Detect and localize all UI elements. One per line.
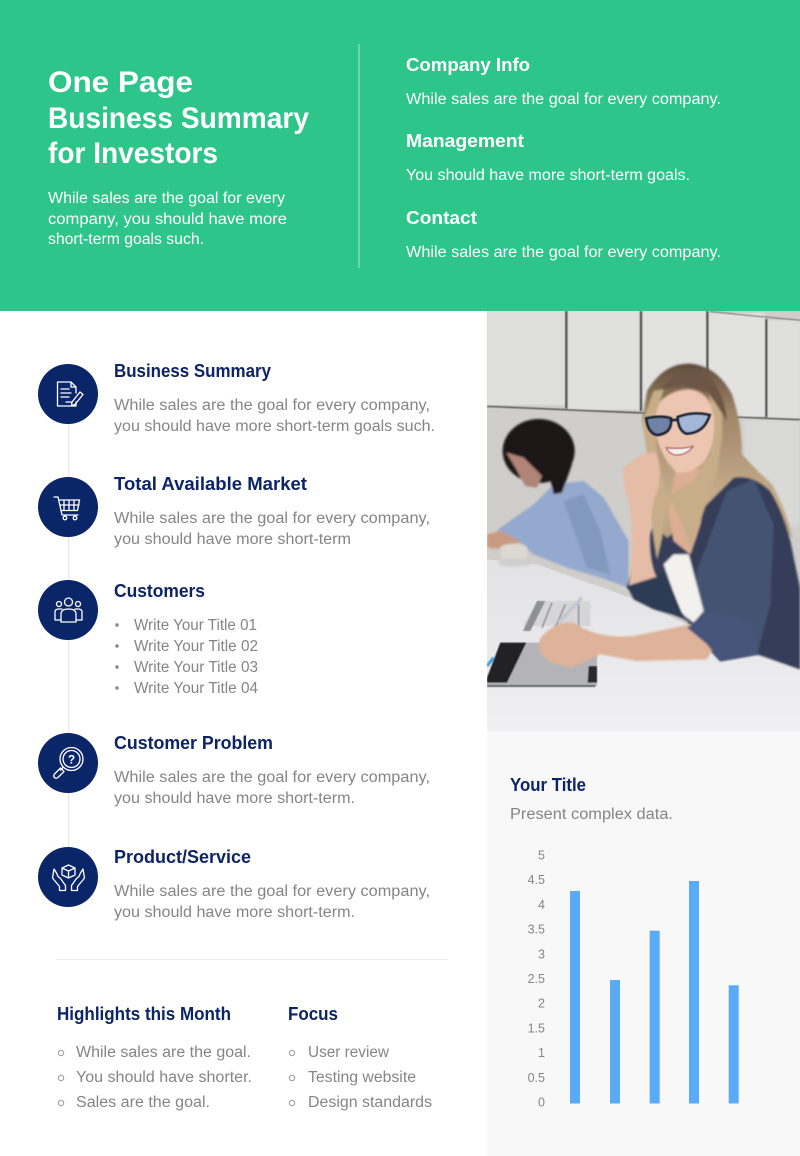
y axis labels: 3.5 xyxy=(528,923,545,937)
front hair xyxy=(642,389,722,559)
title: Business Summary xyxy=(48,102,309,135)
keyboard and tablet xyxy=(487,598,597,686)
text: product/service xyxy=(114,847,430,921)
sleeve xyxy=(687,613,759,661)
section: customer problem xyxy=(38,733,430,807)
header intro text: While sales are the goal for every xyxy=(48,190,285,207)
text: product/service: Product/Service xyxy=(114,847,251,867)
text: product/service: While sales are the goal for every company, xyxy=(114,883,430,900)
text: business summary: Business Summary xyxy=(114,361,271,381)
raised hand and arm xyxy=(623,453,660,588)
focus: Focus xyxy=(288,1004,338,1024)
y axis labels: 5 xyxy=(538,848,545,862)
contact xyxy=(406,208,721,261)
y axis labels: 3 xyxy=(538,947,545,961)
management xyxy=(406,131,690,184)
text: business summary: you should have more short-term goals such. xyxy=(114,418,435,435)
icon: magnifying glass with question mark: ? xyxy=(68,752,75,766)
y axis labels: 0.5 xyxy=(528,1071,545,1085)
highlights this month: You should have shorter. xyxy=(76,1069,252,1086)
contact: Contact xyxy=(406,208,477,228)
header intro text: short-term goals such. xyxy=(48,231,204,248)
icon: hands holding box xyxy=(38,847,98,907)
text: customers list: Write Your Title 02 xyxy=(134,638,258,655)
icon: magnifying glass with question mark xyxy=(38,733,98,793)
desk xyxy=(487,559,800,731)
text: customer problem xyxy=(114,733,430,807)
contact: While sales are the goal for every company. xyxy=(406,244,721,261)
highlights this month: Sales are the goal. xyxy=(76,1094,210,1111)
title xyxy=(48,66,309,170)
panel: chart xyxy=(487,731,800,1156)
highlights this month xyxy=(57,1004,252,1111)
company info: Company Info xyxy=(406,55,530,75)
section: total available market xyxy=(38,474,430,548)
title: for Investors xyxy=(48,137,218,170)
text: customers list xyxy=(114,581,258,697)
y axis labels: 0 xyxy=(538,1096,545,1110)
y axis labels xyxy=(528,848,545,1110)
focus: Design standards xyxy=(308,1094,432,1111)
bar chart xyxy=(528,848,739,1110)
woman xyxy=(627,364,800,669)
focus: User review xyxy=(308,1044,390,1061)
jacket xyxy=(627,477,800,669)
focus xyxy=(288,1004,432,1111)
text: total available market: Total Available Market xyxy=(114,474,307,494)
lower arm and hand xyxy=(539,623,714,668)
y axis labels: 4 xyxy=(538,898,545,912)
focus: Testing website xyxy=(308,1069,416,1086)
highlights this month: While sales are the goal. xyxy=(76,1044,251,1061)
icon: people group xyxy=(38,580,98,640)
text: business summary: While sales are the goal for every company, xyxy=(114,397,430,414)
text: customers list: Write Your Title 04 xyxy=(134,680,258,697)
y axis labels: 2.5 xyxy=(528,972,545,986)
shirt xyxy=(664,554,704,623)
y axis labels: 4.5 xyxy=(528,873,545,887)
text: customers list: Customers xyxy=(114,581,205,601)
title: One Page xyxy=(48,66,193,99)
text: customers list: Write Your Title 03 xyxy=(134,659,258,676)
section: product/service xyxy=(38,847,430,921)
company info xyxy=(406,55,721,108)
icon: shopping cart xyxy=(38,477,98,537)
icon: document and pen xyxy=(38,364,98,424)
panel: green header xyxy=(0,0,800,311)
background colleague xyxy=(487,419,629,588)
text: total available market xyxy=(114,474,430,548)
back hair xyxy=(642,364,792,559)
y axis labels: 1.5 xyxy=(528,1021,545,1035)
header intro text xyxy=(48,190,287,248)
chart heading: Your Title xyxy=(510,775,586,795)
text: customer problem: While sales are the goal for every company, xyxy=(114,769,430,786)
chart heading xyxy=(510,775,673,823)
text: total available market: you should have more short-term xyxy=(114,531,351,548)
y axis labels: 2 xyxy=(538,997,545,1011)
text: business summary xyxy=(114,361,435,435)
header intro text: company, you should have more xyxy=(48,211,287,228)
section: customers xyxy=(38,580,258,697)
company info: While sales are the goal for every company. xyxy=(406,91,721,108)
text: customer problem: you should have more short-term. xyxy=(114,790,355,807)
text: customers list: Write Your Title 01 xyxy=(134,617,257,634)
text: product/service: you should have more short-term. xyxy=(114,904,355,921)
glasses xyxy=(646,413,710,435)
management: You should have more short-term goals. xyxy=(406,167,690,184)
highlights this month: Highlights this Month xyxy=(57,1004,231,1024)
chart heading: Present complex data. xyxy=(510,806,673,823)
text: customer problem: Customer Problem xyxy=(114,733,273,753)
timeline connector xyxy=(68,394,70,877)
smile xyxy=(666,446,693,455)
bars xyxy=(570,881,739,1104)
management: Management xyxy=(406,131,524,151)
neck xyxy=(669,468,710,554)
section: business summary xyxy=(38,361,435,435)
text: total available market: While sales are the goal for every company, xyxy=(114,510,430,527)
photo: two women working at a desk xyxy=(487,311,800,731)
y axis labels: 1 xyxy=(538,1046,545,1060)
face xyxy=(655,389,715,473)
